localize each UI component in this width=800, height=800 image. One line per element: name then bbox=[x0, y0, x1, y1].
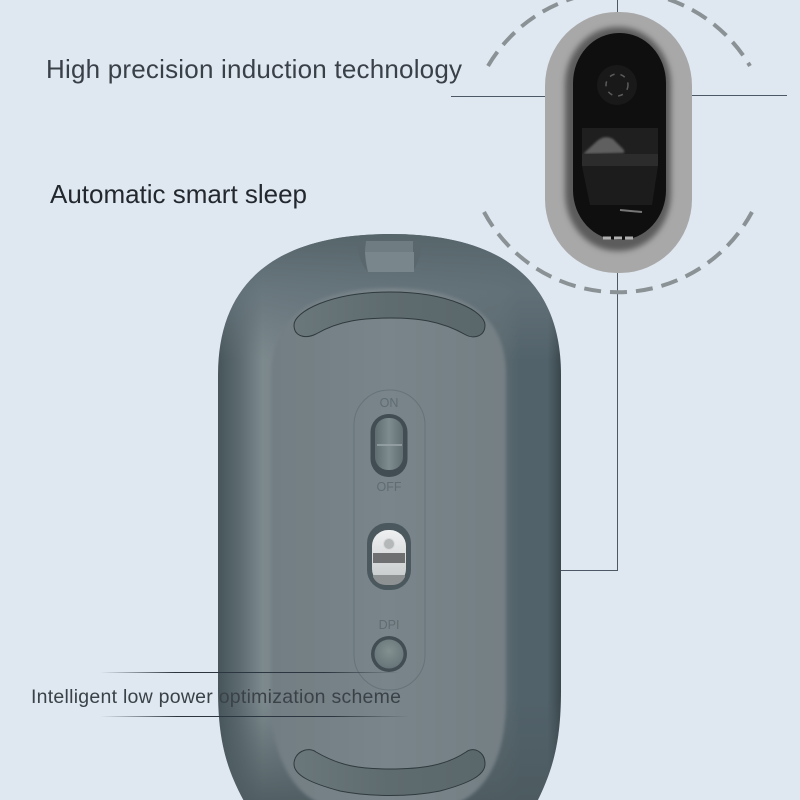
DPI button bbox=[371, 618, 407, 672]
switch panel outline bbox=[354, 390, 425, 690]
top notch bbox=[358, 241, 421, 272]
callout lines for low power text bbox=[100, 672, 410, 717]
DPI label: DPI bbox=[379, 618, 399, 632]
body shell bbox=[218, 234, 561, 800]
sensor lens bbox=[597, 65, 637, 105]
sensor highlights bbox=[620, 210, 642, 212]
dashed circle around sensor bbox=[484, 0, 752, 292]
power switch bbox=[370, 396, 408, 494]
sensor black window bbox=[573, 33, 666, 240]
heading: high precision: High precision induction technology bbox=[46, 54, 462, 84]
OFF label: OFF bbox=[376, 480, 402, 494]
bottom foot pad bbox=[294, 750, 485, 796]
mouse body bbox=[218, 234, 561, 800]
sensor window on mouse bbox=[367, 523, 411, 590]
heading: smart sleep: Automatic smart sleep bbox=[50, 179, 307, 209]
sensor close-up bbox=[545, 12, 692, 273]
sensor prism bbox=[582, 128, 658, 154]
connector lines bbox=[423, 0, 787, 570]
ON label: ON bbox=[380, 396, 398, 410]
inner face bbox=[271, 288, 506, 800]
heading: low power: Intelligent low power optimization scheme bbox=[31, 686, 401, 708]
sensor rubber ring bbox=[545, 12, 692, 273]
top foot pad bbox=[294, 292, 485, 337]
